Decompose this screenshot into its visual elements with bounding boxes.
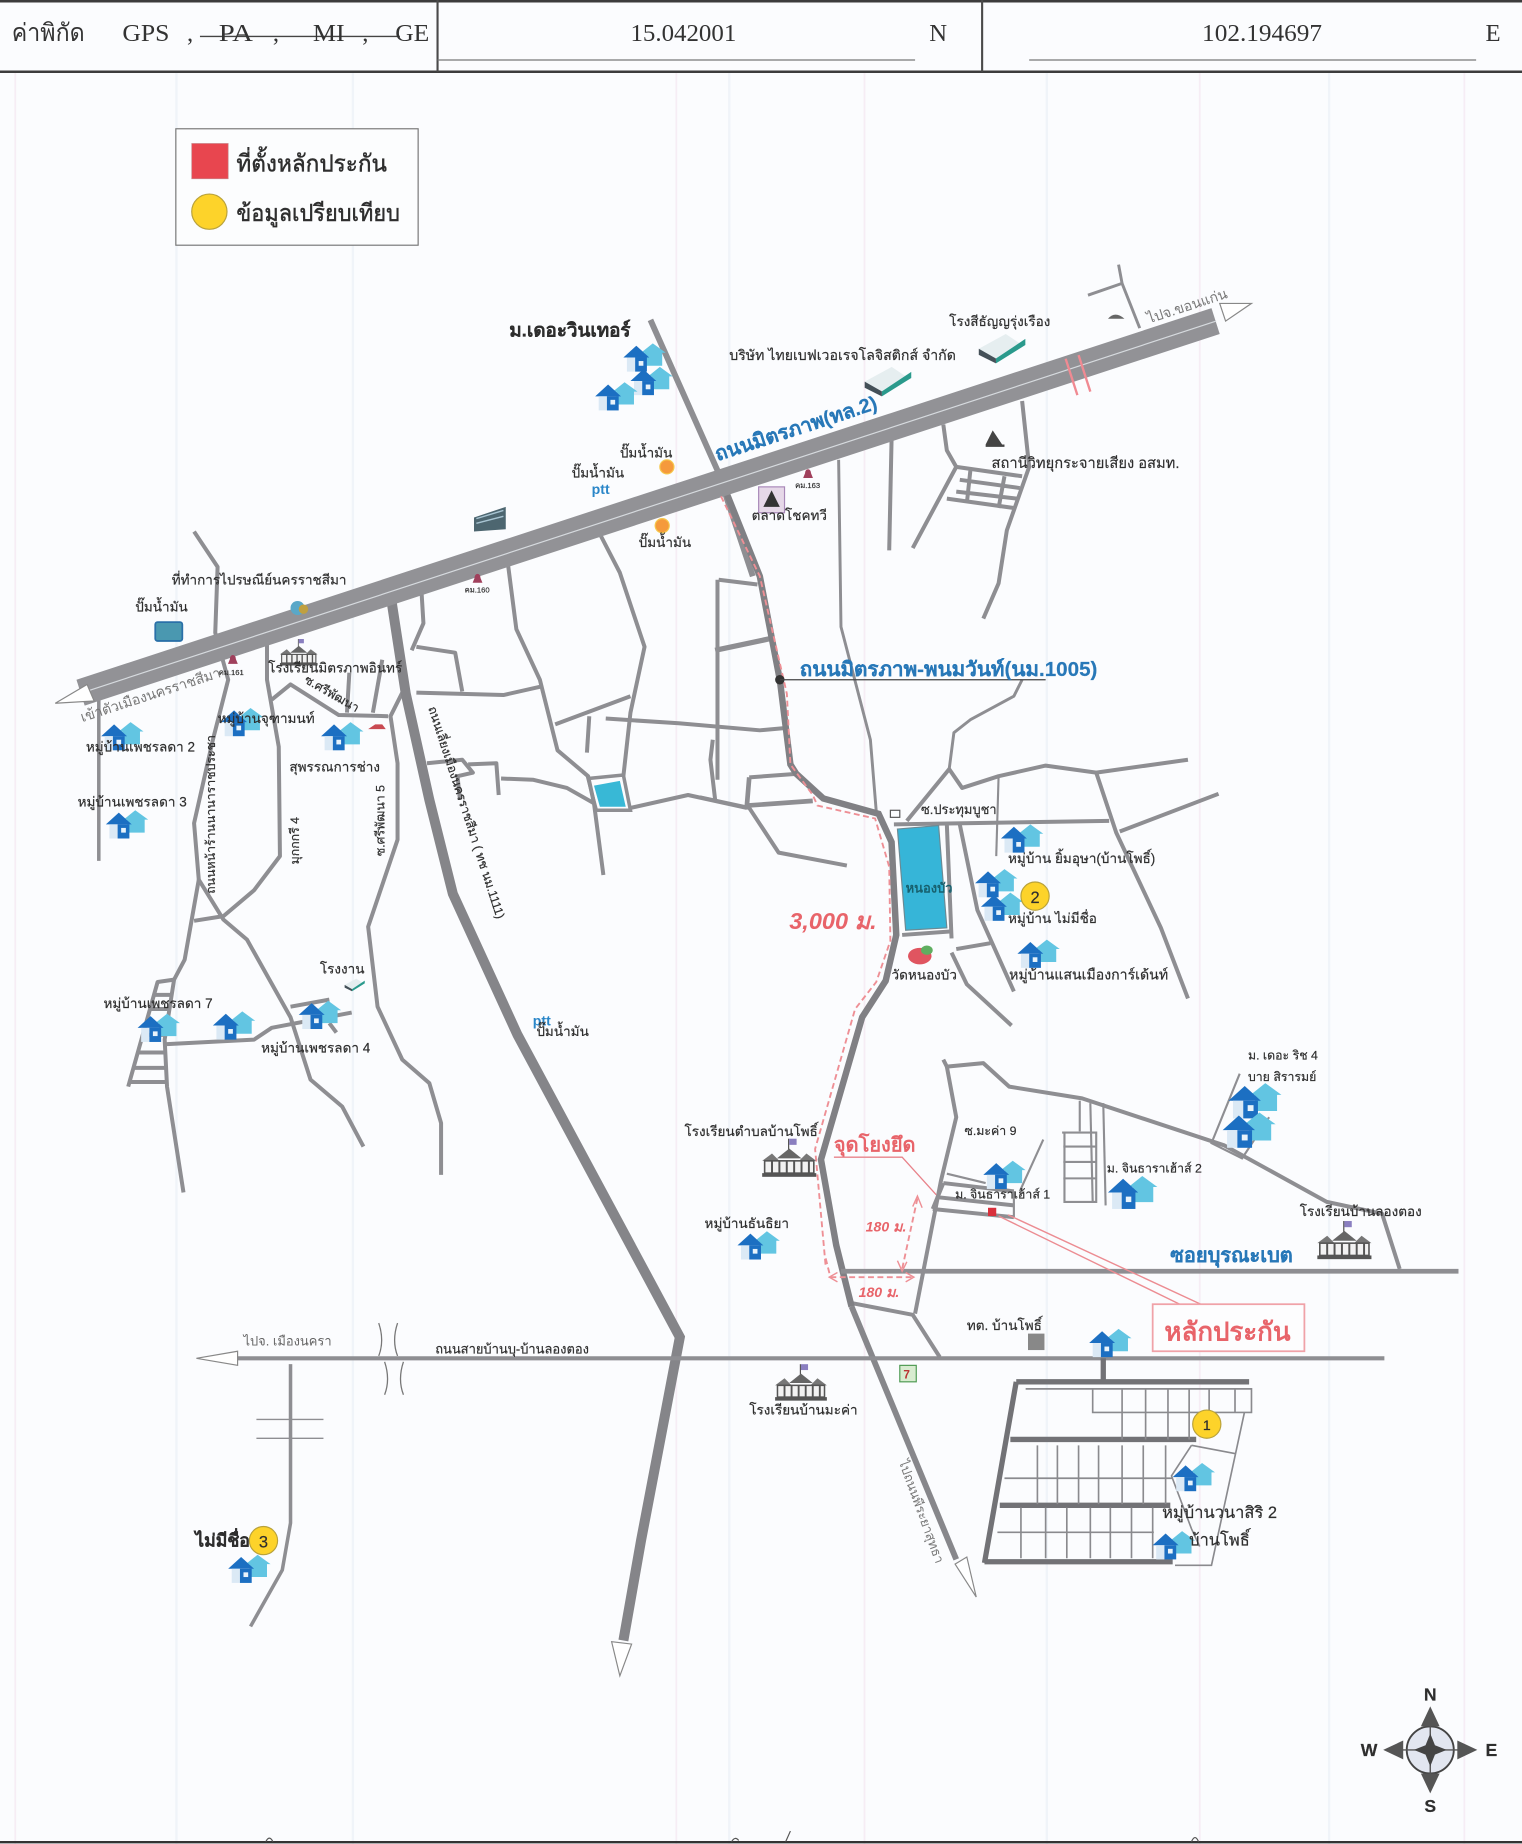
place labels: หมู่บ้าน ยิ้มอุษา(บ้านโพธิ์) xyxy=(1008,848,1155,867)
callout: collateral: หลักประกัน xyxy=(1164,1319,1291,1347)
road labels: ไปจ. เมืองนครา xyxy=(242,1333,332,1348)
place labels: ม.เดอะวินเทอร์ xyxy=(509,319,631,340)
distance label 3,000 m: 3,000 ม. xyxy=(789,908,877,934)
compass: S xyxy=(1424,1796,1436,1816)
coordinates header: 15.042001 xyxy=(630,20,736,47)
highway 2 xyxy=(76,308,1220,706)
callout: collateral xyxy=(1153,1304,1304,1351)
overpass marker xyxy=(1066,355,1090,395)
place labels: โรงเรียนบ้านมะค่า xyxy=(749,1402,858,1418)
route dashed line xyxy=(721,496,890,1267)
small landmarks: 7 xyxy=(903,1368,910,1381)
place labels: ม. จินธาราเฮ้าส์ 2 xyxy=(1107,1161,1202,1175)
place labels: บริษัท ไทยเบฟเวอเรจโลจิสติกส์ จำกัด xyxy=(729,347,956,363)
road labels: ถนนเลี่ยงเมืองนครราชสีมา ( ทช นม.1111) xyxy=(425,704,509,921)
kilometre pins: คม.161 xyxy=(219,668,244,677)
place labels: โรงเรียนบ้านลองตอง xyxy=(1300,1203,1422,1219)
kilometre pins: คม.163 xyxy=(795,481,820,490)
gas stations xyxy=(155,460,674,1028)
arrow: highway east xyxy=(1220,303,1251,321)
distance markers 180 m: 180 ม. xyxy=(859,1284,899,1300)
coordinates header: N xyxy=(929,20,947,47)
gas stations: ptt xyxy=(533,1012,551,1028)
road labels: ซอยบุรณะเบต xyxy=(1170,1245,1293,1268)
place labels: หมู่บ้านวนาสิริ 2 xyxy=(1162,1504,1277,1523)
place labels: สุพรรณการช่าง xyxy=(289,759,380,775)
coordinates header xyxy=(0,0,1522,72)
place labels: ตลาดโชคทวี xyxy=(752,507,827,523)
place labels: ปั๊มน้ำมัน xyxy=(620,442,672,460)
schools xyxy=(280,639,1371,1401)
road labels: ไปจ.ขอนแก่น xyxy=(1144,285,1230,327)
road labels: ซ.มะค่า 9 xyxy=(964,1124,1017,1138)
compass xyxy=(1361,1685,1498,1816)
road: Soi Burana Bet xyxy=(841,1269,1458,1273)
compass: W xyxy=(1361,1740,1378,1760)
houses xyxy=(101,343,1281,1583)
place labels: ม. จินธาราเฮ้าส์ 1 xyxy=(955,1187,1050,1201)
place labels: ที่ทำการไปรษณีย์นครราชสีมา xyxy=(172,570,347,587)
pond: Nong Bua xyxy=(897,826,947,930)
yellow markers xyxy=(249,882,1221,1555)
minor road network xyxy=(99,265,1400,1626)
reference point label xyxy=(834,1132,936,1195)
road labels: ซ.ศรีพัฒนา 5 xyxy=(374,785,388,856)
place labels: ทต. บ้านโพธิ์ xyxy=(967,1315,1044,1333)
road labels: ถนนมิตรภาพ(ทล.2) xyxy=(712,393,880,466)
coordinates header: , xyxy=(273,20,279,47)
compass: E xyxy=(1486,1740,1498,1760)
place labels: หมู่บ้านเพชรลดา 2 xyxy=(86,739,195,755)
kilometre pins: คม.160 xyxy=(465,586,490,595)
yellow markers: 2 xyxy=(1030,889,1040,907)
legend xyxy=(176,129,418,245)
place labels: ไม่มีชื่อ xyxy=(193,1527,250,1550)
coordinates header: 102.194697 xyxy=(1202,20,1322,47)
ring road xyxy=(392,602,680,1641)
road labels: ซ.ศรีพัฒนา xyxy=(302,673,362,715)
place labels: โรงเรียนมิตรภาพอินทร์ xyxy=(268,660,402,676)
place labels: หมู่บ้านเพชรลดา 4 xyxy=(261,1041,371,1057)
legend text: collateral location: ที่ตั้งหลักประกัน xyxy=(236,147,387,177)
road labels: ซ.ประทุมบูชา xyxy=(921,802,997,818)
coordinates header: MI xyxy=(313,20,345,47)
place labels: โรงสีธัญญรุ่งเรือง xyxy=(949,313,1050,330)
coordinates header: GE xyxy=(395,20,429,47)
place labels xyxy=(78,313,1422,1550)
legend: comparison data swatch xyxy=(192,194,227,229)
arrow: Phanom Wan road south xyxy=(955,1557,976,1597)
road labels: ไปถนนพีระยาสุทธา xyxy=(895,1457,947,1566)
coordinates header: GPS xyxy=(122,20,169,47)
place labels: โรงเรียนตำบลบ้านโพธิ์ xyxy=(685,1121,820,1139)
gas stations: ptt xyxy=(592,481,610,497)
place labels: โรงงาน xyxy=(320,961,364,977)
road labels: มุกกกรี 4 xyxy=(288,817,303,864)
yellow markers: 3 xyxy=(259,1534,268,1552)
coordinates header: E xyxy=(1486,20,1501,47)
collateral marker and pointer xyxy=(988,1208,1203,1305)
collateral village plan xyxy=(984,1358,1251,1565)
arrow: ring road south xyxy=(612,1642,632,1676)
road: Ban Bu to Ban Long Tong xyxy=(196,1323,1384,1395)
legend: collateral location swatch xyxy=(192,143,228,179)
place labels: หนองบัว xyxy=(906,881,953,896)
coordinates header: PA xyxy=(219,20,253,47)
road: Mittraphap-Phanom Wan xyxy=(650,320,956,1559)
compass: N xyxy=(1424,1685,1437,1705)
place labels: หมู่บ้านธันธิยา xyxy=(705,1216,789,1232)
factories xyxy=(345,334,1025,991)
place labels: ปั๊มน้ำมัน xyxy=(572,462,624,480)
place labels: หมู่บ้านแสนเมืองการ์เด้นท์ xyxy=(1009,967,1168,984)
legend text: comparison data: ข้อมูลเปรียบเทียบ xyxy=(236,200,400,228)
place labels: หมู่บ้านเพชรลดา 7 xyxy=(104,996,213,1012)
kilometre pins xyxy=(219,469,820,677)
bottom form edge xyxy=(0,1831,1522,1842)
road labels: ถนนมิตรภาพ-พนมวันท์(นม.1005) xyxy=(800,658,1097,681)
road labels xyxy=(78,285,1293,1566)
place labels: สถานีวิทยุกระจายเสียง อสมท. xyxy=(992,455,1179,472)
place labels: ปั๊มน้ำมัน xyxy=(135,597,188,615)
place labels: หมู่บ้านเพชรลดา 3 xyxy=(78,795,187,811)
small pond xyxy=(588,775,630,810)
place labels: วัดหนองบัว xyxy=(892,968,957,983)
place labels: หมู่บ้านจุฑามนท์ xyxy=(218,710,315,727)
yellow markers: 1 xyxy=(1203,1417,1211,1433)
place labels: บ้านโพธิ์ xyxy=(1189,1527,1252,1549)
reference point label: จุดโยงยึด xyxy=(834,1132,916,1157)
distance markers 180 m: 180 ม. xyxy=(866,1218,906,1234)
place labels: ม. เดอะ ริช 4 xyxy=(1248,1049,1318,1063)
place labels: บาย สิรารมย์ xyxy=(1248,1070,1316,1084)
place labels: หมู่บ้าน ไม่มีชื่อ xyxy=(1008,909,1097,927)
coordinates header: , xyxy=(187,20,193,47)
place labels: ปั๊มน้ำมัน xyxy=(536,1021,589,1039)
arrow: highway west xyxy=(55,684,94,703)
coordinates header: , xyxy=(362,20,368,47)
road labels: ถนนสายบ้านบุ-บ้านลองตอง xyxy=(435,1342,589,1358)
road labels: เข้าตัวเมืองนครราชสีมา xyxy=(78,664,223,725)
distance markers 180 m xyxy=(826,1196,922,1300)
small landmarks xyxy=(291,315,1124,1382)
coordinates header: ค่าพิกัด xyxy=(12,20,85,47)
road labels: ถนนหน้าร้านนานาราชประชา xyxy=(204,735,218,894)
place labels: ปั๊มน้ำมัน xyxy=(639,532,691,550)
